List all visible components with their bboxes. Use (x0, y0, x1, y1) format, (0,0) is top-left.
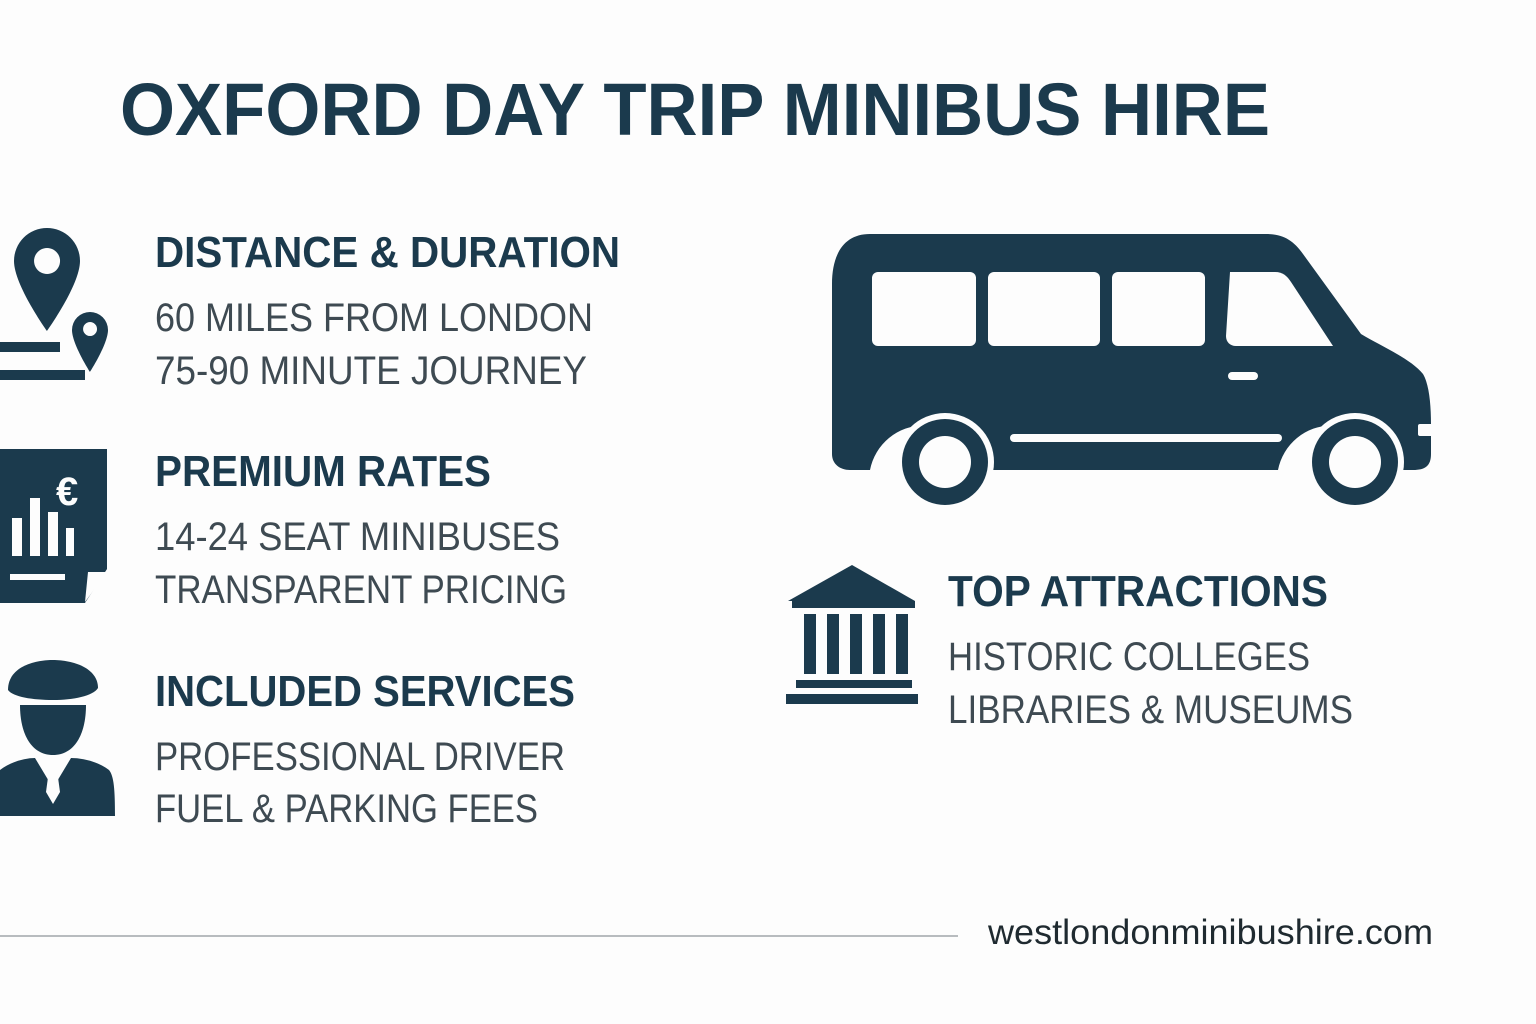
section: included services: INCLUDED SERVICES (155, 667, 575, 716)
section: top attractions: TOP ATTRACTIONS (948, 567, 1328, 616)
section: premium rates: 14-24 SEAT MINIBUSES (155, 515, 560, 559)
icon: museum building (786, 565, 918, 704)
section: premium rates: TRANSPARENT PRICING (155, 568, 567, 612)
icon: driver (0, 660, 115, 816)
section: premium rates: PREMIUM RATES (155, 447, 491, 496)
section: top attractions: HISTORIC COLLEGES (948, 635, 1310, 679)
section: distance & duration: 75-90 MINUTE JOURNEY (155, 349, 587, 393)
section: included services: FUEL & PARKING FEES (155, 787, 538, 831)
section: distance & duration: DISTANCE & DURATION (155, 228, 620, 277)
section: included services (155, 667, 575, 831)
section: top attractions (948, 567, 1353, 732)
icon: pricing document: € (56, 470, 78, 514)
section: included services: PROFESSIONAL DRIVER (155, 735, 565, 779)
icon: map pins route (0, 228, 108, 380)
section: distance & duration: 60 MILES FROM LONDON (155, 296, 593, 340)
section: top attractions: LIBRARIES & MUSEUMS (948, 688, 1353, 732)
section: distance & duration (155, 228, 620, 393)
title: OXFORD DAY TRIP MINIBUS HIRE (120, 68, 1270, 151)
icon: pricing document (0, 449, 107, 603)
section: premium rates (155, 447, 567, 612)
website footer: westlondonminibushire.com (987, 913, 1433, 952)
icon: minibus (832, 234, 1435, 511)
